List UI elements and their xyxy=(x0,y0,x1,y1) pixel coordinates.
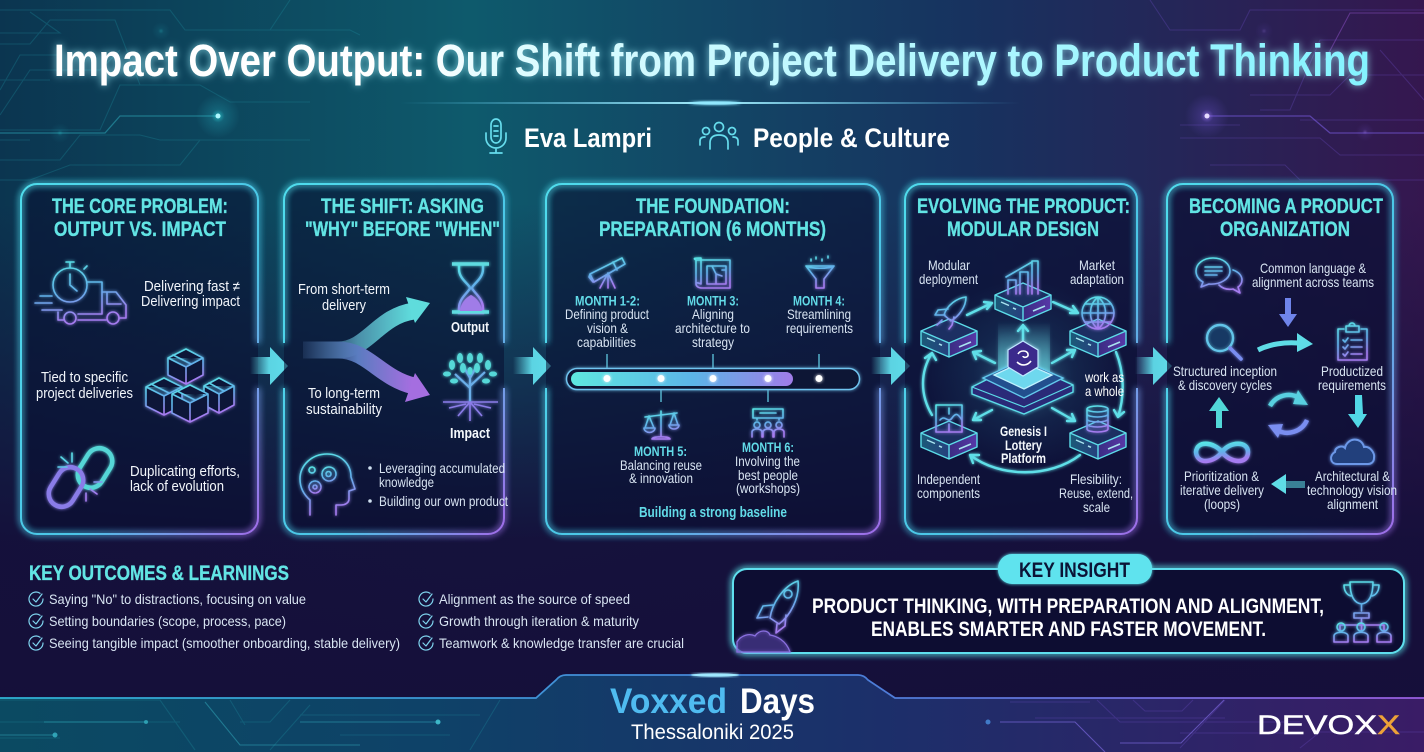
heading xyxy=(52,195,228,241)
outcomes right column: Teamwork & knowledge transfer are crucial xyxy=(439,635,684,651)
icon: refresh cycle xyxy=(1268,390,1308,438)
heading: KEY OUTCOMES & LEARNINGS xyxy=(29,562,289,585)
icon: rocket xyxy=(737,581,798,652)
month 6: (workshops) xyxy=(736,480,800,496)
text: tied to deliveries: project deliveries xyxy=(36,386,133,402)
text: delivering fast xyxy=(141,279,240,310)
icon: hourglass xyxy=(452,264,489,313)
arrow: shift to foundation xyxy=(513,347,551,385)
month 1-2: vision & xyxy=(587,320,629,336)
heading: EVOLVING THE PRODUCT: xyxy=(917,195,1130,218)
heading: MODULAR DESIGN xyxy=(947,218,1099,241)
text: tied to deliveries: Tied to specific xyxy=(41,370,128,386)
arrow: left to prioritization xyxy=(1271,474,1305,494)
panel: the shift xyxy=(284,184,508,534)
event name: Voxxed xyxy=(610,682,727,721)
heading xyxy=(917,195,1130,241)
panel: product organization xyxy=(1167,184,1397,534)
bullet list: Building our own product xyxy=(379,493,508,509)
label: market adaptation xyxy=(1070,257,1124,287)
month 3: Aligning xyxy=(692,306,734,322)
icon: people xyxy=(700,123,738,149)
month 5: & innovation xyxy=(629,470,693,486)
label: modular deployment xyxy=(919,257,978,287)
month 6: MONTH 6: xyxy=(742,440,794,455)
text: prioritization: iterative delivery xyxy=(1180,482,1264,498)
heading: THE SHIFT: ASKING xyxy=(321,195,484,218)
event name: Days xyxy=(740,682,815,721)
icon: clipboard xyxy=(1338,323,1367,360)
bullet list: Leveraging accumulated xyxy=(379,460,505,476)
text: tied to deliveries xyxy=(36,370,133,402)
arrow: problem to shift xyxy=(250,347,288,385)
icon: microphone xyxy=(486,119,506,153)
central platform xyxy=(972,322,1073,414)
text: delivering fast: Delivering fast ≠ xyxy=(144,279,240,295)
month 1-2: Defining product xyxy=(565,306,649,322)
speaker name: Eva Lampri xyxy=(524,123,652,153)
label: work as a whole: work as xyxy=(1084,369,1124,385)
platform: rocket xyxy=(921,297,977,357)
key outcomes and learnings xyxy=(29,562,684,651)
footer band xyxy=(0,673,1424,752)
icon: scales xyxy=(644,411,679,439)
text: duplicating efforts xyxy=(130,464,240,495)
heading xyxy=(1189,195,1383,241)
text: structured inception: & discovery cycles xyxy=(1178,377,1272,393)
footer circuit traces xyxy=(0,700,500,750)
icon: stacked boxes xyxy=(146,349,234,422)
label: output: Output xyxy=(451,320,489,336)
bullet list xyxy=(368,460,508,509)
icon: telescope xyxy=(589,258,625,288)
text: productized requirements xyxy=(1318,363,1386,393)
arrow: down to cloud xyxy=(1348,395,1367,428)
text: prioritization: (loops) xyxy=(1204,496,1240,512)
speaker row xyxy=(486,119,950,153)
label: flexibility: Reuse, extend, xyxy=(1059,485,1133,501)
icon: head with gears xyxy=(300,454,355,515)
event name xyxy=(610,682,815,744)
icon: infinity loop xyxy=(1196,444,1248,461)
department: People & Culture xyxy=(753,123,950,153)
platform: data stack xyxy=(1070,406,1126,459)
outcomes right column: Alignment as the source of speed xyxy=(439,591,630,607)
icon: delivery truck with stopwatch xyxy=(35,262,126,324)
logo: devoxx: DEVOX X xyxy=(1257,710,1400,740)
text: prioritization: Prioritization & xyxy=(1184,468,1260,484)
text: architectural xyxy=(1307,468,1397,512)
key insight callout xyxy=(733,554,1404,653)
label: independent components: components xyxy=(917,485,980,501)
pill label xyxy=(998,554,1152,584)
month 3 xyxy=(675,294,750,350)
insight statement xyxy=(812,595,1324,641)
text: common language: Common language & xyxy=(1260,260,1367,276)
label: genesis platform: Lottery xyxy=(1005,437,1042,453)
text: from short-term xyxy=(298,282,390,314)
label: independent components xyxy=(917,471,980,501)
icon: funnel xyxy=(806,256,834,288)
month 6: best people xyxy=(738,467,798,483)
text: prioritization xyxy=(1180,468,1264,512)
month 1-2 xyxy=(565,294,649,350)
text: duplicating efforts: Duplicating efforts, xyxy=(130,464,240,480)
arrow: foundation to modular xyxy=(871,347,910,385)
heading xyxy=(305,195,500,241)
arrow: curved to requirements xyxy=(1258,333,1313,352)
month 4: MONTH 4: xyxy=(793,294,845,308)
label: market adaptation: adaptation xyxy=(1070,271,1124,287)
label: genesis platform xyxy=(1000,423,1047,466)
text: to long-term: To long-term xyxy=(308,386,380,402)
month 6: Involving the xyxy=(735,453,800,469)
outcomes left column: Seeing tangible impact (smoother onboarding, stable delivery) xyxy=(49,635,400,651)
month 4: requirements xyxy=(786,320,853,336)
heading: "WHY" BEFORE "WHEN" xyxy=(305,218,500,241)
text: productized requirements: Productized xyxy=(1321,363,1383,379)
title divider glow xyxy=(400,101,1020,105)
month 1-2: capabilities xyxy=(577,334,636,350)
text: common language xyxy=(1252,260,1374,290)
label: work as a whole: a whole xyxy=(1085,383,1124,399)
arrow: branching to output and impact xyxy=(303,297,430,402)
text: to long-term xyxy=(306,386,383,418)
text: common language: alignment across teams xyxy=(1252,274,1374,290)
month 5 xyxy=(620,444,702,486)
month 1-2: MONTH 1-2: xyxy=(575,294,640,308)
modular platform diagram xyxy=(921,261,1126,472)
text: from short-term: delivery xyxy=(322,298,367,314)
caption: baseline: Building a strong baseline xyxy=(639,505,787,521)
icon: magnifier xyxy=(1207,325,1241,359)
bullet list: knowledge xyxy=(379,474,434,490)
month 3: architecture to xyxy=(675,320,750,336)
text: architectural: Architectural & xyxy=(1315,468,1391,484)
outcomes right column: Growth through iteration & maturity xyxy=(439,613,639,629)
month 4: Streamlining xyxy=(787,306,851,322)
panel: modular design xyxy=(905,184,1137,534)
heading: THE CORE PROBLEM: xyxy=(52,195,228,218)
label: independent components: Independent xyxy=(917,471,980,487)
label: flexibility: scale xyxy=(1083,499,1110,515)
text: structured inception: Structured inception xyxy=(1173,363,1277,379)
platform: globe xyxy=(1070,297,1126,357)
text: architectural: alignment xyxy=(1327,496,1378,512)
platform: puzzle xyxy=(921,405,977,459)
month 6 xyxy=(735,440,800,496)
text: delivering fast: Delivering impact xyxy=(141,294,240,310)
arrow: down from language xyxy=(1279,298,1297,327)
text: structured inception xyxy=(1173,363,1277,393)
icon: workshop xyxy=(752,409,784,437)
icon: chat bubbles xyxy=(1196,258,1242,293)
label: flexibility: Flesibility: xyxy=(1070,471,1122,487)
icon: cloud xyxy=(1331,440,1374,464)
check icons xyxy=(29,592,433,650)
label: modular deployment: Modular xyxy=(928,257,970,273)
outcomes left column: Saying "No" to distractions, focusing on value xyxy=(49,591,306,607)
icon: trophy and team xyxy=(1334,582,1391,642)
heading: OUTPUT VS. IMPACT xyxy=(54,218,226,241)
arrows xyxy=(923,302,1124,472)
insight statement: PRODUCT THINKING, WITH PREPARATION AND ALIGNMENT, xyxy=(812,595,1324,618)
panel: the foundation xyxy=(546,184,880,534)
label: market adaptation: Market xyxy=(1079,257,1115,273)
event name: Thessaloniki 2025 xyxy=(631,721,794,744)
panel: the core problem xyxy=(21,184,258,534)
icon: tree with roots xyxy=(443,353,498,421)
heading xyxy=(599,195,826,241)
heading: THE FOUNDATION: xyxy=(636,195,790,218)
platform: chart xyxy=(995,261,1051,321)
label: modular deployment: deployment xyxy=(919,271,978,287)
label: impact: Impact xyxy=(450,426,490,442)
outcomes right column xyxy=(439,591,684,651)
text: from short-term: From short-term xyxy=(298,282,390,298)
icon: blueprint xyxy=(694,258,730,288)
arrow: modular to product organization xyxy=(1135,347,1172,385)
month 4 xyxy=(786,294,853,336)
pill label: KEY INSIGHT xyxy=(1019,559,1130,582)
heading: PREPARATION (6 MONTHS) xyxy=(599,218,826,241)
outcomes left column: Setting boundaries (scope, process, pace) xyxy=(49,613,286,629)
text: duplicating efforts: lack of evolution xyxy=(130,479,224,495)
month 3: MONTH 3: xyxy=(687,294,739,308)
month 5: MONTH 5: xyxy=(634,444,687,459)
timeline xyxy=(566,354,860,402)
background circuit traces xyxy=(0,0,1424,180)
label: genesis platform: Genesis I xyxy=(1000,423,1047,439)
label: genesis platform: Platform xyxy=(1001,450,1046,466)
label: flexibility xyxy=(1059,471,1133,515)
label: work as a whole xyxy=(1084,369,1124,399)
insight statement: ENABLES SMARTER AND FASTER MOVEMENT. xyxy=(871,618,1266,641)
month 3: strategy xyxy=(692,334,734,350)
outcomes left column xyxy=(49,591,400,651)
month 5: Balancing reuse xyxy=(620,457,702,473)
heading: ORGANIZATION xyxy=(1220,218,1350,241)
icon: broken chain link xyxy=(44,443,117,512)
text: to long-term: sustainability xyxy=(306,402,383,418)
arrow: up to inception xyxy=(1209,397,1229,428)
text: productized requirements: requirements xyxy=(1318,377,1386,393)
text: architectural: technology vision xyxy=(1307,482,1397,498)
